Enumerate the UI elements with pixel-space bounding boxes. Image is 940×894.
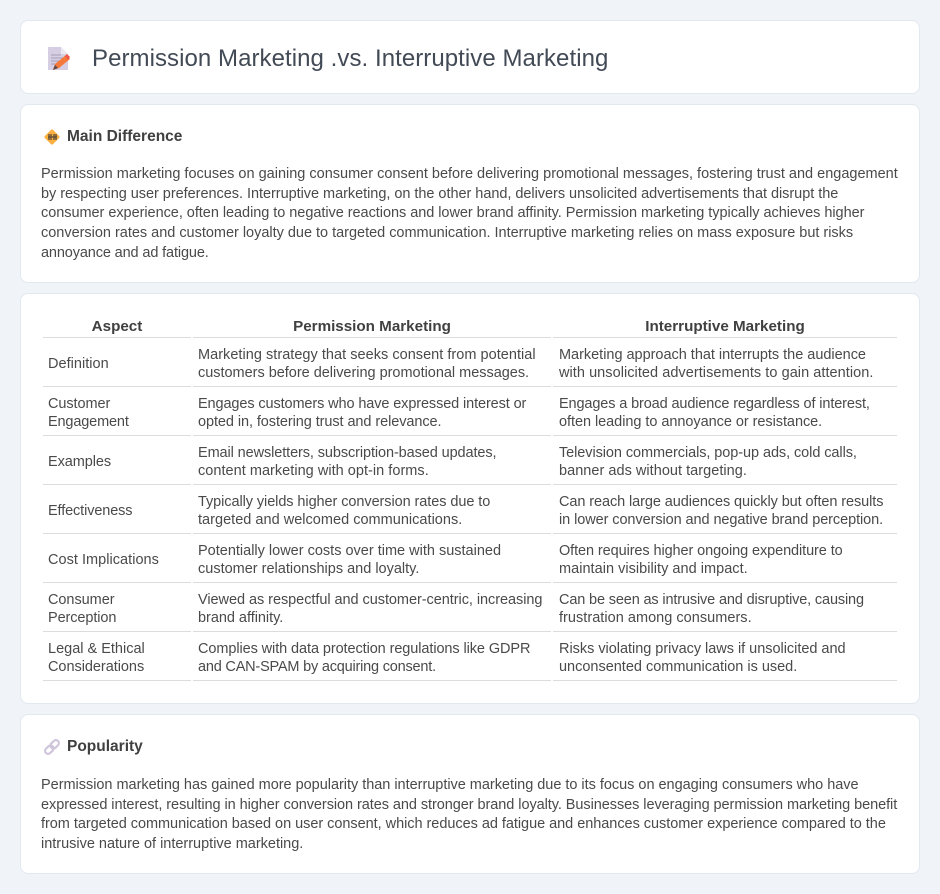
cell: interruptive engagement: often leading to annoyance or resistance. [559, 414, 822, 430]
text: popularity: from targeted communication based on user consent, which reduces ad fatigue and enhances customer experience compared to the [41, 816, 886, 832]
text: main difference: Permission marketing focuses on gaining consumer consent before delivering promotional messages, fostering trust and engagement [41, 166, 898, 182]
cell: interruptive legal: unconsented communication is used. [559, 659, 797, 675]
cell: interruptive perception: frustration among consumers. [559, 610, 752, 626]
row label: definition: Definition [48, 356, 109, 372]
cell: interruptive examples [559, 445, 857, 479]
row label: legal and ethical: Considerations [48, 659, 144, 675]
icon: orange diamond sign [44, 129, 60, 145]
cell: permission engagement [198, 396, 526, 430]
cell: permission legal [198, 641, 530, 675]
cell: permission examples: content marketing with opt-in forms. [198, 463, 429, 479]
panel: popularity [20, 714, 920, 874]
cell: permission legal: and CAN-SPAM by acquiring consent. [198, 659, 436, 675]
cell: interruptive effectiveness: Can reach large audiences quickly but often results [559, 494, 883, 510]
cell: interruptive definition [559, 347, 873, 381]
cell: interruptive cost: maintain visibility and impact. [559, 561, 748, 577]
cell: permission perception: Viewed as respectful and customer-centric, increasing [198, 592, 542, 608]
cell: interruptive examples: Television commercials, pop-up ads, cold calls, [559, 445, 857, 461]
row label: legal and ethical: Legal & Ethical [48, 641, 145, 657]
panel: main difference [20, 104, 920, 283]
heading: main difference: Main Difference [67, 128, 182, 145]
text: main difference [41, 166, 898, 261]
row label: examples: Examples [48, 454, 111, 470]
cell: interruptive legal: Risks violating privacy laws if unsolicited and [559, 641, 846, 657]
cell: interruptive effectiveness: in lower conversion and negative brand perception. [559, 512, 883, 528]
row label: consumer perception: Perception [48, 610, 116, 626]
cell: interruptive examples: banner ads without targeting. [559, 463, 747, 479]
cell: permission examples: Email newsletters, subscription-based updates, [198, 445, 496, 461]
row label: customer engagement [48, 396, 129, 430]
cell: permission effectiveness: Typically yields higher conversion rates due to [198, 494, 490, 510]
row label: consumer perception: Consumer [48, 592, 114, 608]
text: popularity: intrusive nature of interruptive marketing. [41, 836, 303, 852]
panel: comparison table [20, 293, 920, 704]
icon: memo with pencil [48, 47, 70, 70]
cell: permission perception [198, 592, 542, 626]
cell: interruptive definition: Marketing approach that interrupts the audience [559, 347, 866, 363]
heading: popularity: Popularity [67, 738, 143, 755]
text: popularity: expressed interest, resulting in higher conversion rates and stronger brand loyalty. Businesses leveraging permission marketing benefit [41, 797, 897, 813]
cell: permission examples [198, 445, 496, 479]
row label: customer engagement: Engagement [48, 414, 129, 430]
text: main difference: consumer experience, often leading to negative reactions and lower brand affinity. Permission marketing typically achieves higher [41, 205, 864, 221]
cell: permission engagement: opted in, fostering trust and relevance. [198, 414, 441, 430]
cell: interruptive legal [559, 641, 846, 675]
cell: permission cost [198, 543, 501, 577]
cell: permission cost: customer relationships and loyalty. [198, 561, 419, 577]
cell: interruptive engagement [559, 396, 870, 430]
cell: interruptive cost [559, 543, 843, 577]
title: Permission Marketing .vs. Interruptive Marketing [92, 45, 608, 72]
cell: permission effectiveness: targeted and welcomed communications. [198, 512, 462, 528]
row label: customer engagement: Customer [48, 396, 110, 412]
text: popularity: Permission marketing has gained more popularity than interruptive marketing due to its focus on engaging consumers who have [41, 777, 859, 793]
cell: permission perception: brand affinity. [198, 610, 283, 626]
text: main difference: by respecting user preferences. Interruptive marketing, on the other hand, delivers unsolicited advertisements that disrupt the [41, 186, 838, 202]
row label: effectiveness: Effectiveness [48, 503, 132, 519]
text: main difference: annoyance and ad fatigue. [41, 245, 209, 261]
cell: permission legal: Complies with data protection regulations like GDPR [198, 641, 530, 657]
row label: legal and ethical [48, 641, 145, 675]
table header: aspect: Aspect [92, 318, 142, 335]
cell: interruptive perception [559, 592, 864, 626]
cell: interruptive perception: Can be seen as intrusive and disruptive, causing [559, 592, 864, 608]
panel: title card [20, 20, 920, 94]
cell: permission definition: customers before delivering promotional messages. [198, 365, 529, 381]
cell: permission engagement: Engages customers who have expressed interest or [198, 396, 526, 412]
table header: interruptive marketing: Interruptive Marketing [645, 318, 805, 335]
cell: permission definition [198, 347, 536, 381]
row label: cost implications: Cost Implications [48, 552, 159, 568]
text: main difference: conversion rates and customer loyalty due to targeted communication. Interruptive marketing relies on mass exposure but risks [41, 225, 853, 241]
icon: link [44, 739, 60, 755]
cell: interruptive engagement: Engages a broad audience regardless of interest, [559, 396, 870, 412]
cell: permission definition: Marketing strategy that seeks consent from potential [198, 347, 536, 363]
cell: interruptive definition: with unsolicited advertisements to gain attention. [559, 365, 873, 381]
cell: interruptive effectiveness [559, 494, 883, 528]
text: popularity [41, 777, 898, 852]
cell: interruptive cost: Often requires higher ongoing expenditure to [559, 543, 843, 559]
table header: permission marketing: Permission Marketing [293, 318, 451, 335]
cell: permission cost: Potentially lower costs over time with sustained [198, 543, 501, 559]
cell: permission effectiveness [198, 494, 490, 528]
row label: consumer perception [48, 592, 116, 626]
